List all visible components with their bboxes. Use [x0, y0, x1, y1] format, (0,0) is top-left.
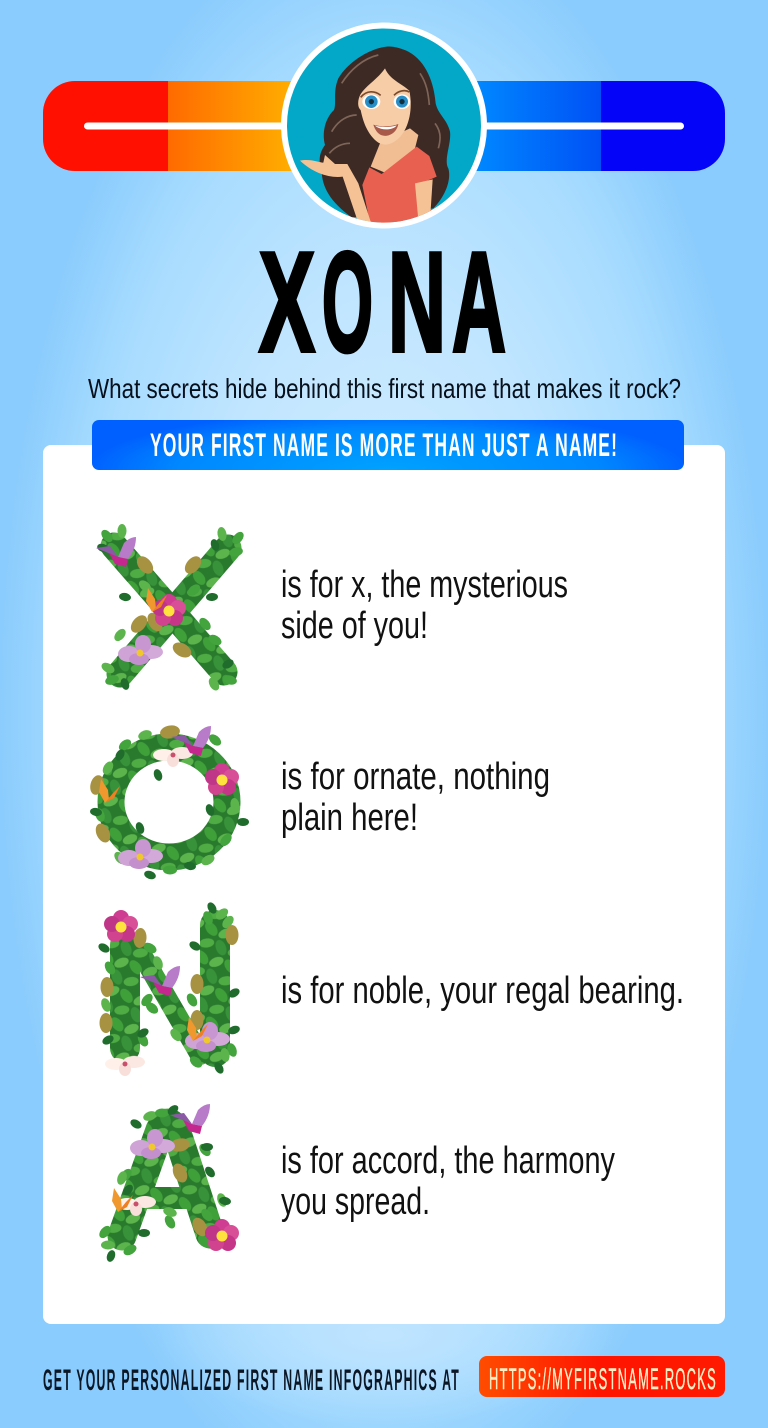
red left segment: [43, 81, 171, 171]
text: X line: is for x, the mysterious: [281, 564, 568, 606]
text: O line: [281, 756, 550, 839]
letter row: A: [97, 1103, 615, 1263]
hair: [320, 47, 450, 217]
footer url button: [479, 1356, 725, 1397]
eyes: [362, 94, 380, 109]
top: [362, 147, 437, 223]
icon: floral letter N: [97, 901, 241, 1076]
letter row: O: [88, 724, 550, 881]
text: X line: [281, 564, 568, 647]
letter row: X: [96, 524, 568, 692]
title: O: [322, 223, 373, 382]
neck: [371, 128, 418, 173]
title: N: [388, 223, 446, 382]
mouth: [373, 124, 398, 136]
letter row: N: [97, 901, 684, 1076]
title: X: [259, 223, 315, 382]
title: [259, 223, 506, 382]
icon: floral letter A: [97, 1103, 239, 1263]
text: A line: you spread.: [281, 1181, 430, 1223]
text: O line: is for ornate, nothing: [281, 756, 550, 798]
text: A line: is for accord, the harmony: [281, 1140, 615, 1182]
icon: floral letter X: [96, 524, 246, 692]
avatar portrait: [284, 26, 484, 226]
icon: floral letter O: [88, 724, 249, 881]
face: [358, 68, 411, 145]
header ribbon: [43, 81, 725, 171]
content panel: [43, 445, 725, 1324]
text: O line: plain here!: [281, 797, 418, 839]
title: A: [452, 223, 506, 382]
banner: [92, 420, 684, 470]
arm and hand: [300, 155, 371, 222]
text: X line: side of you!: [281, 605, 428, 647]
text: A line: [281, 1140, 615, 1223]
